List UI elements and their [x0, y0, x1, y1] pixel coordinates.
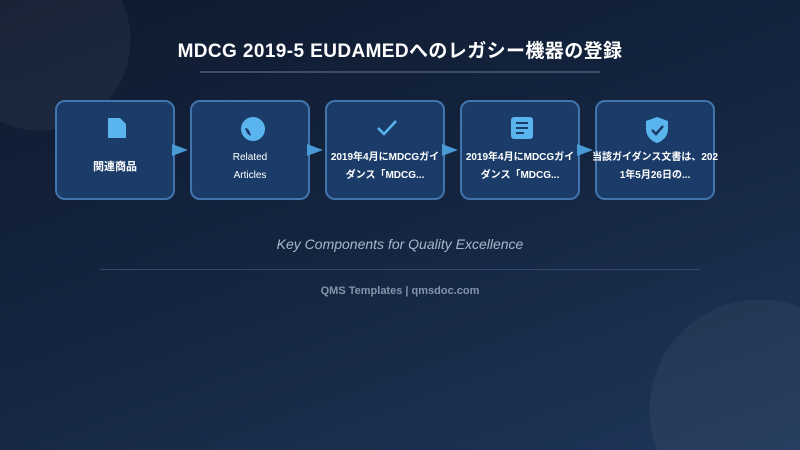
text: step 3: 2019年4月にMDCGガイダンス「MDCG...	[331, 152, 439, 181]
icon: shield check	[646, 117, 668, 143]
text: step 5: 当該ガイダンス文書は、202	[592, 152, 718, 163]
arrow 4	[577, 144, 593, 156]
icon: globe	[241, 117, 265, 141]
title: MDCG 2019-5 EUDAMEDへのレガシー機器の登録	[178, 41, 622, 62]
text: step 2: Articles	[234, 170, 266, 181]
text: step 5	[592, 150, 718, 181]
icon: check	[377, 120, 397, 136]
panel: step 2	[190, 100, 310, 200]
subtitle: Key Components for Quality Excellence	[277, 236, 523, 252]
text: step 5: 1年5月26日の...	[620, 170, 690, 181]
icon: list document	[511, 117, 533, 139]
panel: step 4	[460, 100, 580, 200]
panel: step 1	[55, 100, 175, 200]
text: step 1: 関連商品	[93, 161, 137, 173]
panel: step 5	[595, 100, 715, 200]
footer: QMS Templates | qmsdoc.com	[321, 285, 479, 297]
arrow 3	[442, 144, 458, 156]
icon: document	[108, 118, 126, 138]
arrow 2	[307, 144, 323, 156]
arrow 1	[172, 144, 188, 156]
text: step 2	[233, 152, 267, 181]
text: step 2: Related	[233, 152, 267, 163]
text: step 4: 2019年4月にMDCGガイダンス「MDCG...	[466, 152, 574, 181]
panel: step 3	[325, 100, 445, 200]
